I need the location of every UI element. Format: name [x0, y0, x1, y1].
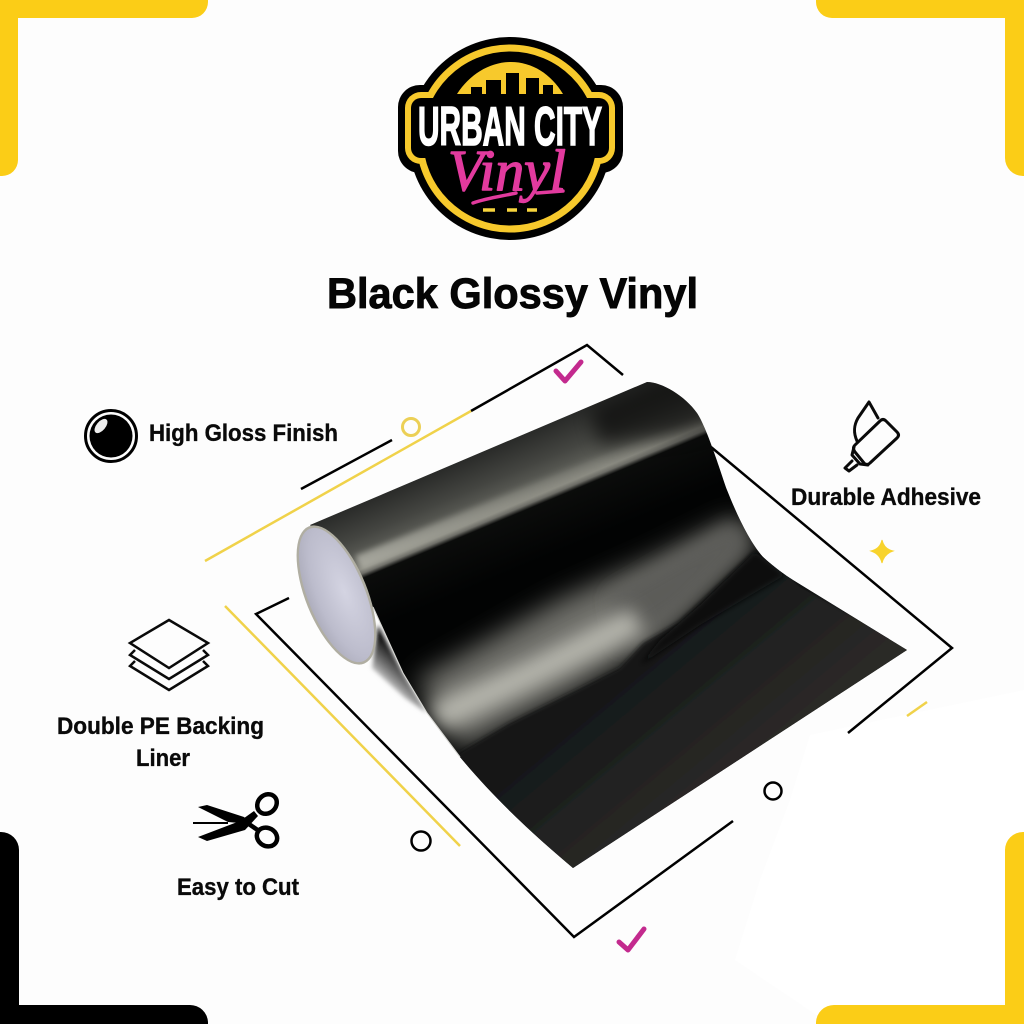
darkening at the top right of the roll [588, 382, 708, 454]
lower flat sheet [460, 551, 907, 868]
icon: glue bottle [845, 402, 898, 471]
pink check: top [556, 362, 581, 381]
icon: scissors [193, 790, 281, 850]
logo: Urban City Vinyl badge [398, 37, 623, 240]
vinyl roll product image [296, 382, 907, 868]
feature: High Gloss Finish [86, 410, 338, 462]
roll and sheet body [310, 382, 907, 868]
sheet fold edge [373, 607, 460, 757]
title: Black Glossy Vinyl [327, 270, 698, 318]
lower broad reflection [417, 517, 752, 750]
bright reflection core [428, 608, 645, 730]
dark crease band [640, 552, 785, 665]
decorative circle: black lower right [764, 782, 782, 800]
label: Easy to Cut [177, 874, 299, 901]
corner bracket: bottom right [816, 832, 1024, 1024]
decorative circle: black lower left [412, 832, 430, 850]
logo underline swoosh [473, 191, 563, 203]
label: Durable Adhesive [791, 484, 981, 511]
feature: Double PE Backing Liner [57, 620, 264, 772]
roll inner core [280, 515, 393, 675]
corner bracket: bottom left [0, 832, 208, 1024]
label: Double PE Backing [57, 713, 264, 740]
logo skyline [457, 62, 563, 95]
feature: Easy to Cut [177, 790, 299, 901]
logo text: URBAN CITY: URBAN CITY [418, 95, 602, 157]
feature: Durable Adhesive [791, 402, 981, 511]
icon: stacked layers [130, 620, 208, 690]
upper gloss stripe, fading to the right [353, 450, 626, 572]
logo road dashes [483, 208, 537, 212]
feature: Double PE Backing Liner: Liner [136, 745, 190, 772]
label: High Gloss Finish [149, 420, 338, 447]
shadow sliver beside fold [372, 625, 427, 713]
corner bracket: top left [0, 0, 208, 176]
corner bracket: top right [816, 0, 1024, 176]
icon: yellow sparkle [871, 540, 893, 563]
right end of the reflection [612, 517, 755, 625]
logo text: Vinyl: Vinyl [448, 138, 566, 203]
pink check: bottom [619, 929, 644, 950]
decorative circle: yellow [402, 418, 420, 436]
frame: dashed outline behind the roll [205, 345, 952, 937]
icon: gloss sphere [86, 410, 136, 462]
